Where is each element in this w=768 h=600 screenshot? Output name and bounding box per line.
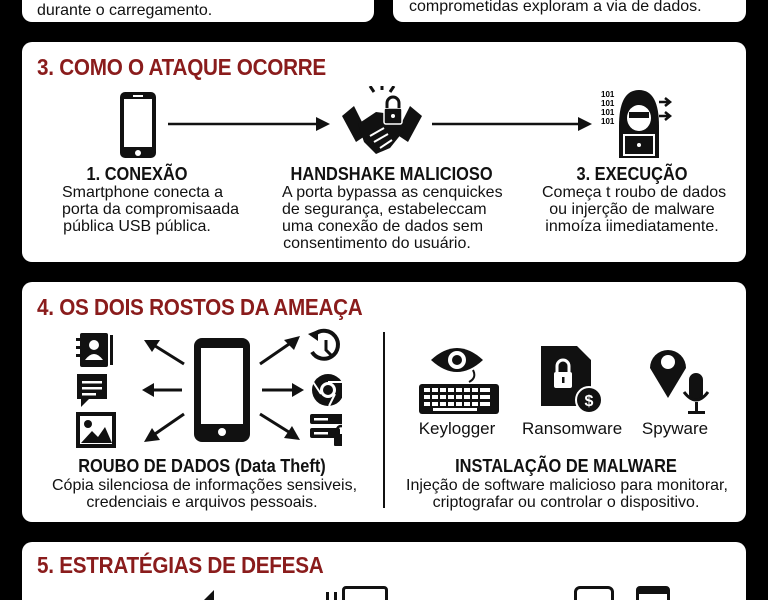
icon: ransomware	[541, 346, 601, 412]
divider	[383, 332, 385, 508]
text: data theft	[52, 477, 357, 511]
labels: malware types: Spyware	[642, 419, 708, 438]
heading: step 1: 1. CONEXÃO	[86, 164, 188, 184]
arrows: right	[260, 336, 304, 440]
block: malware installation	[406, 456, 728, 511]
icon: image	[78, 414, 114, 446]
icon: ransomware: $	[585, 393, 594, 410]
panel: how the attack occurs	[22, 42, 746, 262]
arrows: left	[142, 340, 184, 442]
icon: server with lock	[310, 414, 348, 446]
icon: keylogger	[419, 348, 499, 414]
step 2: malicious handshake	[282, 164, 503, 252]
text: step 2: de segurança, estabeleccam	[282, 201, 487, 218]
icon: contacts	[76, 333, 113, 367]
icon: phone	[120, 92, 156, 158]
block: data theft	[52, 456, 357, 511]
text: malware: criptografar ou controlar o dispositivo.	[433, 494, 699, 511]
labels: malware types	[419, 419, 708, 438]
icon: hacker: 101	[601, 108, 615, 117]
text: step 3: ou injerção de malware	[549, 201, 715, 218]
text: step 1: porta da compromisaada	[62, 201, 239, 218]
panel: top left (partial)	[22, 0, 374, 22]
panel: top right (partial)	[393, 0, 746, 22]
icon: hacker: 101	[601, 99, 615, 108]
labels: malware types: Ransomware	[522, 419, 622, 438]
text: data theft: credenciais e arquivos pessoais.	[86, 494, 318, 511]
title: section 5: 5. ESTRATÉGIAS DE DEFESA	[37, 552, 323, 578]
text: step 1	[62, 184, 240, 235]
title: section 3: 3. COMO O ATAQUE OCORRE	[37, 54, 326, 80]
text: step 2: consentimento do usuário.	[283, 235, 471, 252]
text: step 1: Smartphone conecta a	[62, 184, 223, 201]
icon: handshake with lock	[342, 86, 422, 154]
step 3: execution	[542, 164, 726, 235]
step 1: connection	[62, 164, 240, 235]
heading: step 3: 3. EXECUÇÃO	[576, 164, 688, 184]
icon: hacker: 101	[601, 117, 615, 126]
title: section 4: 4. OS DOIS ROSTOS DA AMEAÇA	[37, 294, 362, 320]
icons: defense (partial)	[204, 586, 670, 600]
text: top left: durante o carregamento.	[37, 2, 212, 19]
text: step 1: pública USB pública.	[63, 218, 211, 235]
icon: hacker: 101	[601, 90, 615, 99]
text: step 3: inmoíza iimediatamente.	[545, 218, 719, 235]
icon: phone	[194, 338, 250, 442]
panel: defense strategies	[22, 542, 746, 600]
arrow: step 1 to 2	[168, 117, 330, 131]
labels: malware types: Keylogger	[419, 419, 495, 438]
heading: malware: INSTALAÇÃO DE MALWARE	[455, 456, 677, 476]
text: malware	[406, 477, 728, 511]
panel: two faces of the threat	[22, 282, 746, 522]
icon: chrome	[312, 374, 344, 406]
text: step 2: uma conexão de dados sem	[282, 218, 483, 235]
diagram: data theft	[76, 328, 342, 448]
text: step 3	[542, 184, 726, 235]
icon: hacker	[601, 90, 672, 158]
icon: chat	[77, 374, 107, 407]
arrow: step 2 to 3	[432, 117, 592, 131]
heading: step 2: HANDSHAKE MALICIOSO	[291, 164, 493, 184]
text: step 3: Começa t roubo de dados	[542, 184, 726, 201]
text: malware: Injeção de software malicioso para monitorar,	[406, 477, 728, 494]
text: step 2: A porta bypassa as cenquickes	[282, 184, 503, 201]
icon: history	[308, 330, 338, 359]
text: step 2	[282, 184, 503, 252]
icon: spyware	[650, 350, 710, 414]
heading: data theft: ROUBO DE DADOS (Data Theft)	[78, 456, 326, 476]
text: data theft: Cópia silenciosa de informações sensiveis,	[52, 477, 357, 494]
